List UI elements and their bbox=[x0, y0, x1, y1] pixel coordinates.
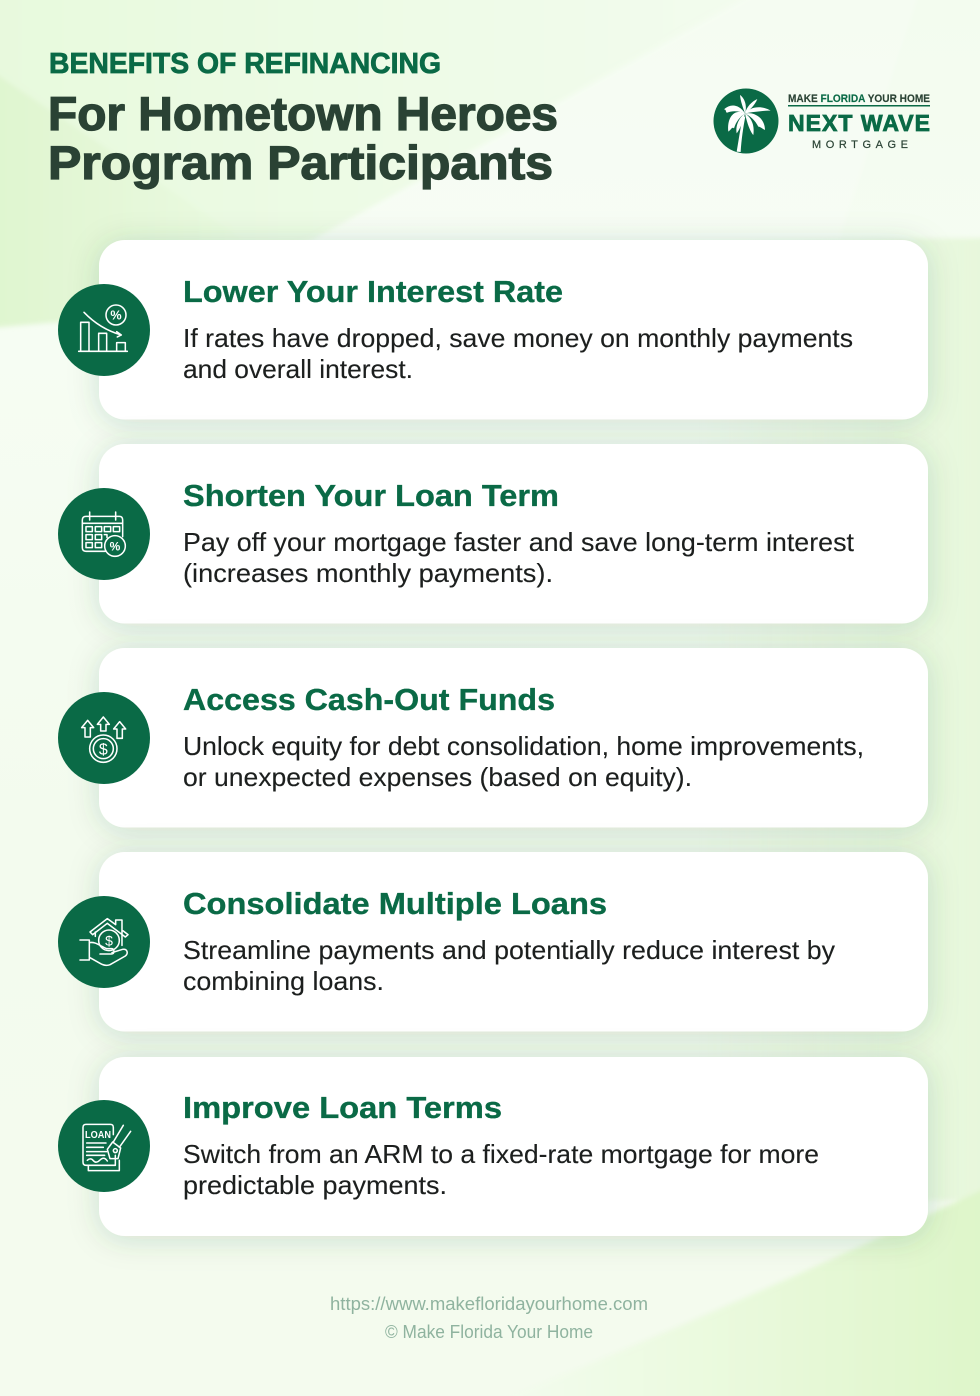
title: For Hometown Heroes bbox=[48, 87, 558, 140]
logo text: NEXT WAVE bbox=[788, 110, 930, 136]
footer: https://www.makefloridayourhome.com bbox=[330, 1294, 648, 1314]
panel: shorten your loan term bbox=[58, 444, 928, 624]
card text: If rates have dropped, save money on monthly payments bbox=[183, 323, 853, 353]
card heading: Lower Your Interest Rate bbox=[183, 274, 563, 309]
card text bbox=[183, 323, 853, 384]
card heading: Shorten Your Loan Term bbox=[183, 478, 559, 513]
icon: coin with up arrows: $ bbox=[99, 741, 108, 758]
panel: lower your interest rate bbox=[58, 240, 928, 420]
icon: coin with up arrows bbox=[58, 692, 150, 784]
panel: access cash-out funds bbox=[58, 648, 928, 828]
card text bbox=[183, 935, 835, 996]
card text bbox=[183, 527, 855, 588]
icon: loan document and pen bbox=[58, 1100, 150, 1192]
card text: or unexpected expenses (based on equity). bbox=[183, 762, 692, 792]
icon: house and hand bbox=[58, 896, 150, 988]
card text: Switch from an ARM to a fixed-rate mortgage for more bbox=[183, 1139, 819, 1169]
card text: combining loans. bbox=[183, 966, 384, 996]
icon: house and hand: $ bbox=[105, 932, 113, 948]
heading: eyebrow: BENEFITS OF REFINANCING bbox=[49, 48, 441, 80]
icon: falling bar chart with percent: % bbox=[110, 308, 122, 322]
card text: (increases monthly payments). bbox=[183, 558, 553, 588]
card text: and overall interest. bbox=[183, 354, 413, 384]
icon: calendar with percent bbox=[58, 488, 150, 580]
card text: Unlock equity for debt consolidation, home improvements, bbox=[183, 731, 864, 761]
title bbox=[48, 87, 558, 189]
panel: improve loan terms bbox=[58, 1057, 928, 1236]
card text bbox=[183, 731, 864, 792]
panel: consolidate multiple loans bbox=[58, 852, 928, 1032]
card text bbox=[183, 1139, 819, 1200]
icon: loan document and pen: LOAN bbox=[85, 1130, 111, 1141]
card heading: Improve Loan Terms bbox=[183, 1090, 502, 1125]
card text: Pay off your mortgage faster and save long-term interest bbox=[183, 527, 855, 557]
logo text: MAKE FLORIDA YOUR HOME bbox=[788, 93, 930, 105]
logo bbox=[714, 88, 930, 154]
footer bbox=[330, 1294, 648, 1342]
icon: calendar with percent: % bbox=[110, 539, 121, 553]
card heading: Access Cash-Out Funds bbox=[183, 682, 555, 717]
logo text: MORTGAGE bbox=[812, 139, 908, 151]
icon: palm tree in circle bbox=[714, 88, 778, 154]
logo text bbox=[788, 93, 930, 151]
title: Program Participants bbox=[48, 136, 553, 189]
card heading: Consolidate Multiple Loans bbox=[183, 886, 607, 921]
card text: predictable payments. bbox=[183, 1170, 447, 1200]
icon: falling bar chart with percent bbox=[58, 284, 150, 376]
card text: Streamline payments and potentially reduce interest by bbox=[183, 935, 835, 965]
footer: © Make Florida Your Home bbox=[385, 1322, 593, 1342]
